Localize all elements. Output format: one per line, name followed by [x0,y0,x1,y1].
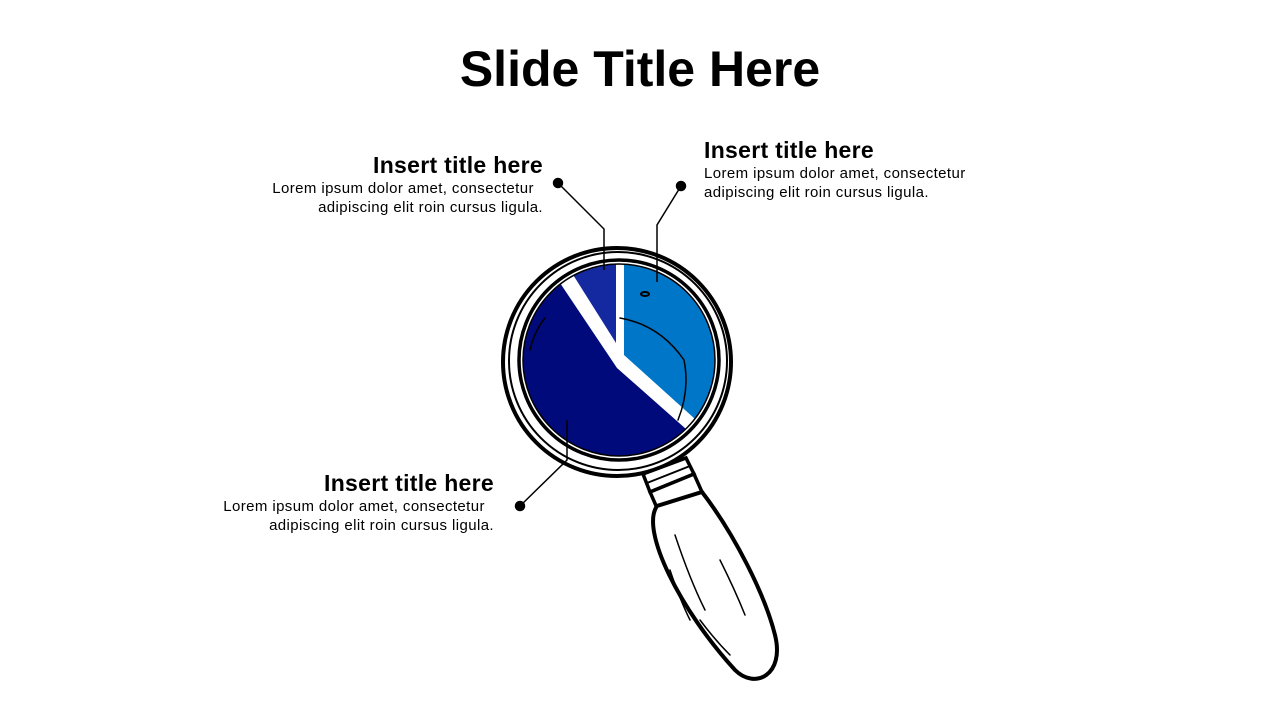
handle collar [643,458,694,492]
text block: bottom left: Lorem ipsum dolor amet, consectetur [223,498,485,515]
pie chart [524,264,714,456]
connector: bottom [516,420,567,510]
text block: top right: Insert title here [704,137,874,163]
connector: top right [657,182,686,282]
text block: bottom left: Insert title here [324,470,494,496]
icon: magnifier [503,248,777,679]
connector: top left [554,178,604,270]
text block: top left: adipiscing elit roin cursus ligula. [318,199,543,216]
text block: top right [704,137,966,201]
text block: top left [272,152,543,216]
text block: bottom left [223,470,494,534]
text block: top right: Lorem ipsum dolor amet, consectetur [704,165,966,182]
magnifier with pie chart [501,178,779,681]
text block: bottom left: adipiscing elit roin cursus ligula. [269,517,494,534]
text block: top right: adipiscing elit roin cursus ligula. [704,184,929,201]
text block: top left: Insert title here [373,152,543,178]
title: Slide Title Here [460,41,820,97]
text block: top left: Lorem ipsum dolor amet, consectetur [272,180,534,197]
handle [653,492,777,679]
